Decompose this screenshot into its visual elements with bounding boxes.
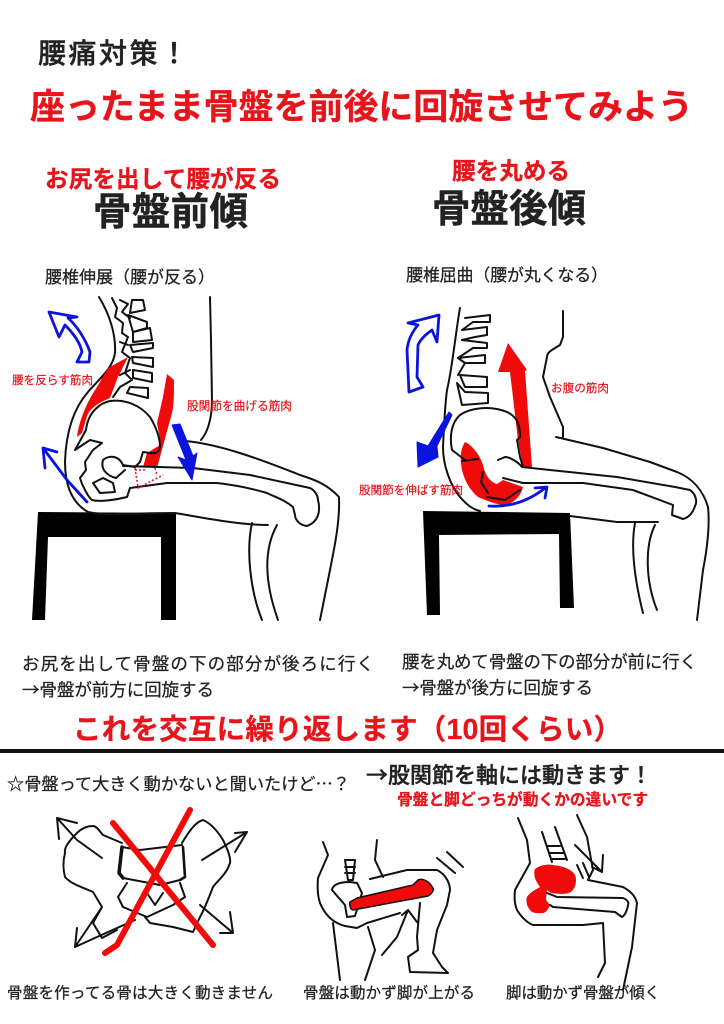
heading: 骨盤後傾: 骨盤後傾 xyxy=(432,188,586,231)
label: lumbar extension: 腰椎伸展（腰が反る） xyxy=(45,268,215,287)
heading: main red headline: 座ったまま骨盤を前後に回旋させてみよう xyxy=(30,88,693,127)
text block: right explanation: 腰を丸めて骨盤の下の部分が前に行く xyxy=(402,652,697,672)
skeleton: right pelvis and femur xyxy=(451,408,696,519)
muscle: hip flexor xyxy=(143,374,174,468)
dotted hip region xyxy=(135,468,163,488)
panel: left seated figure, anterior tilt xyxy=(12,297,339,620)
caption: pelvis moves: 脚は動かず骨盤が傾く xyxy=(506,984,660,1002)
muscle: gluteal xyxy=(461,442,523,505)
stool: left xyxy=(32,512,176,620)
label: abdominal muscle: お腹の筋肉 xyxy=(551,381,609,395)
heading: 骨盤前傾: 骨盤前傾 xyxy=(93,191,248,234)
arrow: blue thick hip xyxy=(172,424,197,480)
subheading: red anterior tilt: お尻を出して腰が反る xyxy=(45,165,281,192)
muscle: abdominal arrow xyxy=(498,343,532,467)
arrow: blue outline top right xyxy=(407,315,439,392)
label: lumbar flexion: 腰椎屈曲（腰が丸くなる） xyxy=(406,266,608,285)
panel: right seated figure, posterior tilt xyxy=(359,308,709,620)
arrow and motion lines xyxy=(575,845,603,878)
text block: left explanation xyxy=(22,654,374,702)
title: 腰痛対策: 腰痛対策！ xyxy=(38,38,188,69)
arrow: blue under hip xyxy=(489,487,547,506)
red cross xyxy=(105,810,213,953)
caption: leg moves: 骨盤は動かず脚が上がる xyxy=(303,984,475,1002)
red femur xyxy=(350,879,433,910)
red pelvis xyxy=(526,865,576,913)
motion lines and arrow xyxy=(382,852,463,955)
spine: right lumbar vertebrae xyxy=(457,315,490,405)
label: hip extensor: 股関節を伸ばす筋肉 xyxy=(359,483,463,497)
illustration: leg moves xyxy=(318,840,463,980)
muscle: back extensor xyxy=(77,357,128,437)
text block: left explanation: →骨盤が前方に回旋する xyxy=(22,677,214,702)
answer heading: →股関節を軸には動きます！ xyxy=(366,758,652,790)
illustration: pelvis moves xyxy=(515,815,637,990)
panel: posterior tilt heading xyxy=(432,158,586,231)
label: back muscle: 腰を反らす筋肉 xyxy=(12,373,93,387)
skeleton: left pelvis and femur xyxy=(75,401,319,526)
text block: left explanation: お尻を出して骨盤の下の部分が後ろに行く xyxy=(22,654,374,674)
text block: right explanation: →骨盤が後方に回旋する xyxy=(402,675,593,700)
question text: ☆骨盤って大きく動かないと聞いたけど…？ xyxy=(7,770,350,795)
panel: anterior tilt heading xyxy=(45,165,281,234)
arrow: blue thick lower left xyxy=(417,412,452,467)
callout: repeat instruction: これを交互に繰り返します（10回くらい） xyxy=(73,714,622,746)
label: hip flexor: 股関節を曲げる筋肉 xyxy=(187,399,292,413)
answer subheading red: 骨盤と脚どっちが動くかの違いです xyxy=(397,790,648,809)
arrow: blue lower left xyxy=(43,448,87,502)
body outline: right xyxy=(443,308,709,620)
subheading: red posterior tilt: 腰を丸める xyxy=(452,158,570,184)
caption: pelvis: 骨盤を作ってる骨は大きく動きません xyxy=(7,984,273,1002)
stool: right xyxy=(423,511,574,615)
text block: right explanation xyxy=(402,652,697,700)
body outline: left xyxy=(65,297,339,620)
illustration: pelvis with red cross xyxy=(57,810,247,953)
spine: left lumbar vertebrae xyxy=(112,298,153,398)
arrow: blue outline top left xyxy=(49,312,90,362)
